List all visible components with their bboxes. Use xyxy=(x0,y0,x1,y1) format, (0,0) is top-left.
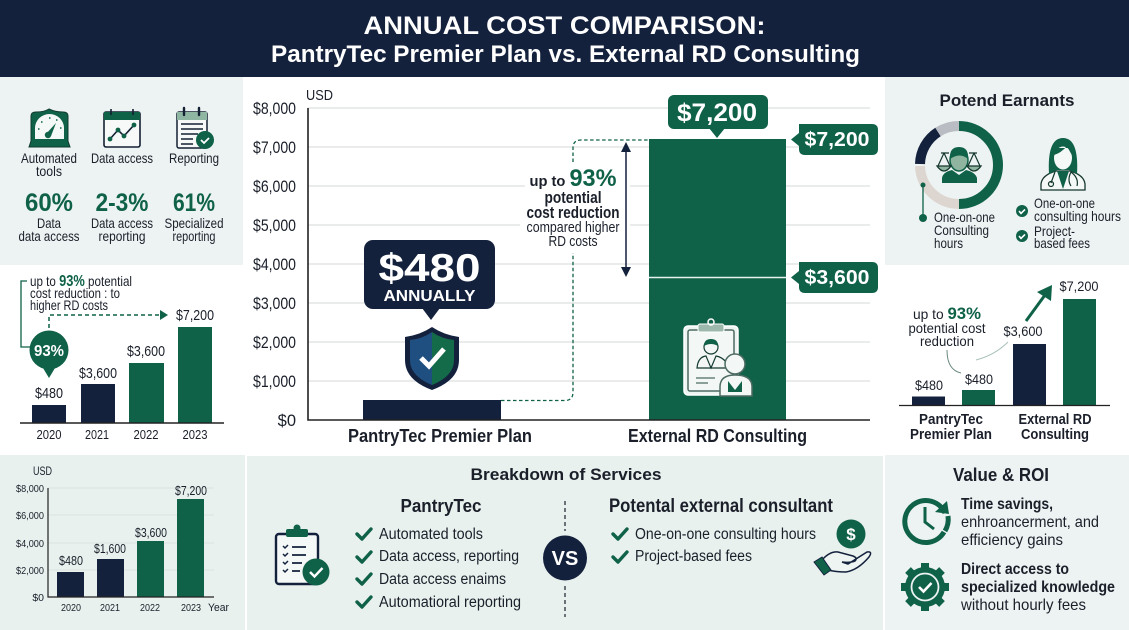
donut label: One-on-one xyxy=(934,209,995,225)
metric values xyxy=(25,189,215,217)
category labels xyxy=(910,411,1092,443)
callout text: potential cost xyxy=(908,320,986,336)
icon: clock xyxy=(905,501,949,543)
panel: USD by year chart xyxy=(0,455,245,630)
bar: External RD xyxy=(649,139,786,420)
panel: USD by year chart: USD xyxy=(33,466,52,478)
title banner xyxy=(0,0,1129,77)
y axis labels: $7,000 xyxy=(253,139,296,157)
main bar chart: USD xyxy=(306,88,333,104)
title banner: PantryTec Premier Plan vs. External RD Consulting xyxy=(271,41,860,68)
bar values and years: $3,600 xyxy=(79,365,117,382)
donut label xyxy=(934,209,995,251)
panel: yearly bar chart with callout xyxy=(20,273,224,442)
y axis labels: $3,000 xyxy=(253,295,296,313)
donut label: hours xyxy=(934,235,963,251)
checklist xyxy=(1016,195,1121,251)
callout text: higher RD costs xyxy=(30,297,108,313)
bubble: $480 annually xyxy=(364,240,495,320)
category labels: PantryTec xyxy=(919,411,983,428)
metric captions: reporting xyxy=(98,228,146,244)
y axis labels: $2,000 xyxy=(253,334,296,352)
panel: potential earnings: Potend Earnants xyxy=(940,92,1074,110)
text: direct access: specialized knowledge xyxy=(961,579,1115,596)
text: direct access: without hourly fees xyxy=(960,597,1086,614)
icon: shield xyxy=(405,327,459,390)
bar values: $480 xyxy=(915,377,943,393)
PantryTec list: Automated tools xyxy=(379,526,483,543)
PantryTec list: Data access enaims xyxy=(379,571,506,588)
bar values and years: $3,600 xyxy=(127,343,165,360)
panel: breakdown of services xyxy=(247,456,883,630)
icon: gear check xyxy=(901,563,949,611)
years: 2022 xyxy=(140,602,160,614)
bars xyxy=(20,327,224,423)
metric labels: Data access xyxy=(91,150,153,166)
callout text: cost reduction : to xyxy=(30,285,120,301)
icon: coin over hand xyxy=(814,520,871,575)
metric labels: tools xyxy=(36,163,62,179)
tag: $3,600: $3,600 xyxy=(804,266,870,289)
metric captions: reporting xyxy=(172,228,216,244)
callout text: reduction xyxy=(920,333,974,349)
PantryTec list: Data access, reporting xyxy=(379,548,519,565)
consultant list xyxy=(613,526,816,565)
metric captions: data access xyxy=(18,228,80,244)
category labels: Premier Plan xyxy=(910,426,992,443)
bar values: $480 xyxy=(59,554,83,568)
axis labels: $2,000 xyxy=(16,565,44,577)
donut chart xyxy=(920,126,998,204)
callout: 93% reduction: up to 93% xyxy=(530,165,616,192)
bar values: $480 xyxy=(965,371,993,387)
callout: 93% reduction: cost reduction xyxy=(526,204,620,222)
category labels xyxy=(348,425,807,446)
bar values: $7,200 xyxy=(175,484,207,498)
metric values: 60% xyxy=(25,189,73,217)
category labels: External RD xyxy=(1018,411,1092,428)
PantryTec list: Automatioral reporting xyxy=(379,594,521,611)
text: direct access: Direct access to xyxy=(961,561,1069,578)
panel: potential earnings xyxy=(885,77,1129,265)
bar values: $7,200 xyxy=(1060,278,1099,294)
bar values and years: 2020 xyxy=(36,427,62,442)
callout text xyxy=(908,304,986,349)
main bar chart xyxy=(253,88,878,446)
category labels: PantryTec Premier Plan xyxy=(348,425,532,446)
metric labels: Reporting xyxy=(169,150,219,166)
bars xyxy=(899,299,1110,406)
callout: 93% reduction: potential xyxy=(544,189,602,207)
text: direct access xyxy=(960,561,1115,614)
years xyxy=(61,602,229,614)
column heading: external: Potental external consultant xyxy=(609,496,834,517)
text: time savings: Time savings, xyxy=(961,496,1053,513)
metric captions: Data access xyxy=(91,215,153,231)
callout: 93% reduction: RD costs xyxy=(548,233,598,250)
bubble: $480 annually: ANNUALLY xyxy=(384,288,476,305)
double arrow xyxy=(621,142,631,277)
text: time savings: enhroancerment, and xyxy=(961,514,1099,531)
metric captions: Data xyxy=(37,215,61,231)
bar values: $1,600 xyxy=(94,542,126,556)
icon: checklist clipboard xyxy=(276,524,330,586)
bubble: $7,200 top xyxy=(668,95,768,138)
y axis labels: $0 xyxy=(278,412,296,430)
checklist: Project- xyxy=(1034,223,1075,239)
axis labels: $6,000 xyxy=(16,510,44,522)
y axis labels: $4,000 xyxy=(253,256,296,274)
VS divider xyxy=(543,501,587,617)
bar values and years: 2023 xyxy=(182,427,208,442)
callout: 93% reduction xyxy=(525,165,622,251)
bar values and years: 2021 xyxy=(85,427,109,442)
metric labels xyxy=(21,150,219,179)
icon: coin over hand: $ xyxy=(846,525,856,544)
text: time savings: efficiency gains xyxy=(961,532,1063,549)
icon: report xyxy=(177,108,214,149)
bar values xyxy=(59,484,207,568)
icon: clipboard consultant xyxy=(684,319,752,396)
panel: plan comparison bars xyxy=(899,278,1110,443)
category labels: External RD Consulting xyxy=(628,425,807,446)
checklist: One-on-one xyxy=(1034,195,1095,211)
panel: value and ROI: Value & ROI xyxy=(953,465,1049,485)
bar values: $3,600 xyxy=(135,526,167,540)
title banner: ANNUAL COST COMPARISON: xyxy=(364,12,766,40)
axis labels: $0 xyxy=(32,592,44,604)
panel: value and ROI xyxy=(885,455,1129,630)
years: Year xyxy=(208,602,229,614)
checklist: based fees xyxy=(1034,235,1090,251)
growth arrow xyxy=(1026,285,1052,321)
consultant list: One-on-one consulting hours xyxy=(635,526,816,543)
93% badge: 93% xyxy=(34,343,64,360)
years: 2021 xyxy=(100,602,120,614)
bar values and years: $480 xyxy=(35,385,63,402)
bar values and years xyxy=(35,307,214,442)
donut label: Consulting xyxy=(934,222,989,238)
y axis labels: $6,000 xyxy=(253,178,296,196)
years: 2020 xyxy=(61,602,81,614)
leader line xyxy=(919,182,927,222)
connector dashed xyxy=(501,140,649,400)
icon: doctor xyxy=(1041,138,1085,190)
metric values: 2-3% xyxy=(96,189,148,217)
callout text: up to 93% xyxy=(913,304,981,323)
PantryTec list xyxy=(357,526,521,611)
callout text: up to 93% potential xyxy=(30,273,132,290)
axis labels xyxy=(16,483,44,604)
y axis labels: $5,000 xyxy=(253,217,296,235)
y axis labels xyxy=(253,100,296,430)
icon: person with scales xyxy=(937,147,981,183)
metric captions xyxy=(18,215,224,244)
metric values: 61% xyxy=(173,189,215,217)
93% badge xyxy=(30,330,68,378)
bar values and years: $7,200 xyxy=(176,307,214,324)
column heading: PantryTec: PantryTec xyxy=(400,495,482,516)
text: time savings xyxy=(961,496,1099,549)
y axis labels: $1,000 xyxy=(253,373,296,391)
bubble: $7,200 top: $7,200 xyxy=(677,99,757,127)
callout: 93% reduction: compared higher xyxy=(526,219,620,236)
bars xyxy=(48,488,214,597)
axis labels: $4,000 xyxy=(16,538,44,550)
tag: $3,600 xyxy=(791,262,878,293)
icon: calendar chart xyxy=(104,109,140,147)
consultant list: Project-based fees xyxy=(635,548,752,565)
metric captions: Specialized xyxy=(164,215,224,231)
VS divider: VS xyxy=(552,548,578,570)
axis labels: $8,000 xyxy=(16,483,44,495)
bubble: $480 annually: $480 xyxy=(378,247,480,290)
panel: breakdown of services: Breakdown of Services xyxy=(470,465,662,484)
years: 2023 xyxy=(181,602,201,614)
bar values: $3,600 xyxy=(1004,323,1043,339)
bar: PantryTec xyxy=(363,400,501,420)
category labels: Consulting xyxy=(1021,426,1089,443)
callout text xyxy=(30,273,132,313)
y axis labels: $8,000 xyxy=(253,100,296,118)
panel: key metrics xyxy=(0,77,243,265)
tag: $7,200 xyxy=(791,124,878,155)
icon: gauge xyxy=(29,109,70,147)
bar values and years: 2022 xyxy=(134,427,158,442)
metric labels: Automated xyxy=(21,150,77,166)
tag: $7,200: $7,200 xyxy=(804,128,870,151)
bar values xyxy=(915,278,1099,393)
